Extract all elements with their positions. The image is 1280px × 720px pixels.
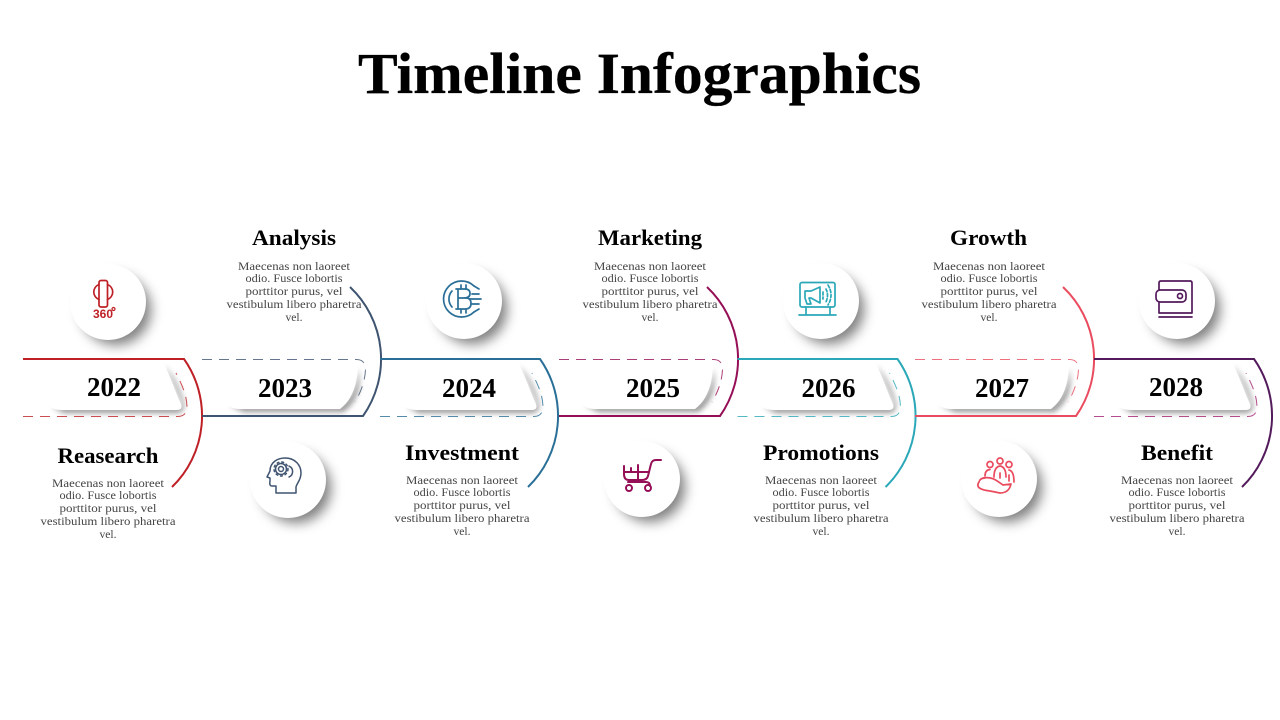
year: 2028: 2028 — [1149, 372, 1203, 402]
text block: Benefit: odio. Fusce lobortis — [1128, 487, 1226, 499]
heading: Investment: Investment — [405, 440, 520, 465]
year tabs — [42, 362, 1250, 410]
text block: Reasearch: odio. Fusce lobortis — [60, 490, 157, 502]
year: 2025: 2025 — [626, 373, 680, 403]
text block: Marketing — [582, 261, 718, 324]
icon: people in a hand — [978, 458, 1014, 493]
text block: Reasearch: vel. — [100, 529, 117, 541]
text block: Investment: vestibulum libero pharetra — [394, 513, 530, 525]
text block: Benefit: porttitor purus, vel — [1128, 500, 1226, 512]
text block: Marketing: Maecenas non laoreet — [594, 261, 707, 273]
year tab shadows — [52, 366, 1253, 413]
icon: 360 degree view: 360 — [93, 307, 113, 321]
text block: Marketing: porttitor purus, vel — [602, 286, 698, 298]
heading: Marketing: Marketing — [598, 225, 702, 250]
segment 2027: coral connector — [915, 287, 1094, 416]
text block: Growth: vel. — [980, 312, 998, 324]
text block: Analysis: vestibulum libero pharetra — [226, 299, 362, 311]
year: 2023: 2023 — [258, 373, 312, 403]
text block: Promotions: porttitor purus, vel — [772, 500, 870, 512]
text block: Reasearch: porttitor purus, vel — [60, 503, 156, 515]
year: 2022: 2022 — [87, 372, 141, 402]
text block: Investment — [394, 475, 530, 538]
segment 2026: teal connector — [738, 359, 916, 487]
icon: shopping cart — [624, 460, 661, 491]
segment 2022: red connector — [23, 359, 202, 487]
year: 2024: 2024 — [442, 373, 496, 403]
text block: Promotions — [754, 475, 888, 538]
icon: bitcoin — [444, 281, 481, 317]
text block: Promotions: vel. — [812, 526, 830, 538]
text block: Promotions: odio. Fusce lobortis — [772, 487, 870, 499]
segment 2025: magenta connector — [559, 287, 738, 416]
segment 2023: slate connector — [202, 287, 381, 416]
text block: Promotions: Maecenas non laoreet — [765, 475, 878, 487]
text block: Analysis: vel. — [286, 312, 303, 324]
heading: Benefit: Benefit — [1141, 440, 1214, 465]
heading: Growth: Growth — [950, 225, 1027, 250]
icon: megaphone on monitor — [799, 282, 836, 315]
text block: Growth: odio. Fusce lobortis — [940, 273, 1038, 285]
icon: head with gears — [267, 458, 301, 493]
icon: wallet — [1156, 281, 1192, 317]
text block: Marketing: odio. Fusce lobortis — [602, 273, 699, 285]
segment 2028: purple connector — [1094, 359, 1272, 487]
text block: Growth: vestibulum libero pharetra — [922, 299, 1056, 311]
icon: 360 degree view — [93, 280, 115, 321]
text block: Benefit — [1110, 475, 1244, 538]
text block: Reasearch — [40, 478, 176, 541]
text block: Benefit: vel. — [1168, 526, 1186, 538]
text block: Analysis: Maecenas non laoreet — [238, 261, 351, 273]
text block: Growth: Maecenas non laoreet — [933, 261, 1046, 273]
text block: Benefit: Maecenas non laoreet — [1121, 475, 1234, 487]
text block: Promotions: vestibulum libero pharetra — [754, 513, 888, 525]
badge shadows — [81, 274, 1220, 523]
text block: Investment: porttitor purus, vel — [414, 500, 510, 512]
text block: Growth — [922, 261, 1056, 324]
text block: Reasearch: Maecenas non laoreet — [52, 478, 165, 490]
heading: Promotions: Promotions — [763, 440, 879, 465]
text block: Benefit: vestibulum libero pharetra — [1110, 513, 1244, 525]
text block: Marketing: vestibulum libero pharetra — [582, 299, 718, 311]
year: 2026: 2026 — [802, 373, 856, 403]
text block: Analysis — [226, 261, 362, 324]
icon badge circles — [70, 263, 1215, 518]
title: Timeline Infographics — [358, 41, 921, 106]
text block: Analysis: odio. Fusce lobortis — [246, 273, 343, 285]
text block: Marketing: vel. — [642, 312, 659, 324]
text block: Growth: porttitor purus, vel — [940, 286, 1038, 298]
text block: Investment: vel. — [454, 526, 471, 538]
text block: Investment: Maecenas non laoreet — [406, 475, 519, 487]
heading: Reasearch: Reasearch — [58, 443, 158, 468]
heading: Analysis: Analysis — [252, 225, 336, 250]
text block: Investment: odio. Fusce lobortis — [414, 487, 511, 499]
year: 2027: 2027 — [975, 373, 1029, 403]
text block: Analysis: porttitor purus, vel — [246, 286, 342, 298]
text block: Reasearch: vestibulum libero pharetra — [40, 516, 176, 528]
segment 2024: blue connector — [380, 359, 558, 487]
